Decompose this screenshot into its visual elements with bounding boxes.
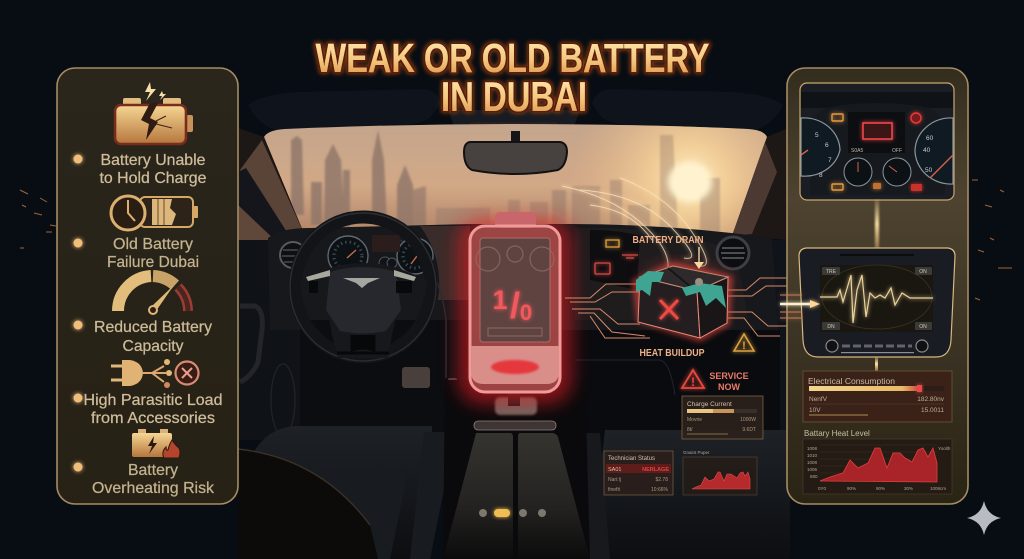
chart: battery heat level: 1008cm [930, 486, 946, 491]
chart: battery heat level: 90% [876, 486, 885, 491]
instrument cluster photo: 50 [925, 167, 933, 174]
chart: battery heat level: 880 [810, 474, 818, 479]
service now label: SERVICE [709, 371, 749, 381]
pedals [402, 367, 457, 393]
head unit [799, 248, 955, 357]
battery drain label: BATTERY DRAIN [632, 234, 704, 246]
panel: electrical consumption: NenfV [809, 396, 828, 403]
panel: electrical consumption: 182.80nv [917, 396, 945, 403]
icon: capacity gauge [118, 276, 188, 314]
panel: technician status: Nari:Ij [608, 477, 621, 483]
head unit: TRE [826, 269, 837, 275]
label: old battery failure dubai: Failure Dubai [107, 254, 199, 271]
light beams connecting screens [875, 200, 879, 371]
percentage symbol: / [510, 285, 520, 326]
wheel badge [343, 278, 380, 288]
panel: charge current: Charge Current [687, 401, 732, 408]
instrument cluster and air vents [280, 235, 749, 276]
label: reduced battery capacity: Capacity [122, 338, 184, 355]
chart: battery heat level: Yoolth [938, 446, 951, 451]
label: high parasitic load: High Parasitic Load [84, 392, 222, 409]
panel: technician status: Technician Status [608, 456, 655, 462]
instrument cluster photo: 6 [825, 142, 829, 149]
arrow into head unit [780, 295, 820, 318]
icon: red warning triangle [682, 370, 704, 389]
cluster warning lights [832, 113, 922, 191]
chart: battery heat level: 1010 [807, 453, 818, 458]
icon: yellow warning triangle: ! [742, 340, 746, 352]
instrument cluster photo: 5 [815, 132, 819, 139]
corrosion [636, 271, 726, 308]
chart: battery heat level: 90% [847, 486, 856, 491]
chart: battery heat level: 1006 [807, 467, 818, 472]
translucent battery gauge [458, 212, 572, 404]
car roof and sun visors [248, 89, 783, 132]
panel: charge current: 1000W [740, 417, 756, 423]
battery heat level label: Battary Heat Level [804, 429, 870, 438]
instrument cluster photo: 8 [819, 172, 823, 179]
circuit traces left [560, 284, 650, 338]
heat buildup label: HEAT BUILDUP [640, 347, 704, 359]
chart: battery heat level: 1008 [807, 446, 818, 451]
rear view mirror [464, 131, 567, 174]
chart: small power chart [683, 450, 757, 495]
label: reduced battery capacity [94, 319, 212, 355]
icon: clock and old battery [111, 196, 198, 230]
bullet [74, 154, 82, 164]
label: battery unable to hold charge [100, 152, 207, 187]
chart: battery heat level: 0Y0 [818, 486, 827, 491]
sparkle watermark [967, 501, 1001, 535]
label: battery overheating risk: Overheating Risk [92, 480, 215, 497]
label: battery unable to hold charge: to Hold Charge [100, 170, 207, 187]
head unit: ON [919, 269, 927, 275]
service now label [709, 371, 749, 392]
pillars and door panels [238, 128, 790, 440]
service now label: NOW [718, 382, 740, 392]
label: battery overheating risk [92, 462, 215, 497]
right panel [787, 68, 968, 504]
dashboard warning icons [595, 240, 638, 274]
panel: electrical consumption: 10V [809, 407, 821, 414]
instrument cluster photo: OFF [892, 148, 902, 154]
panel: electrical consumption: 15.0011 [921, 407, 944, 414]
steering wheel [290, 213, 436, 361]
left panel [57, 68, 238, 504]
instrument cluster photo [800, 83, 954, 200]
panel: technician status: $2.78 [655, 477, 668, 483]
bullet [74, 394, 82, 402]
circuit traces right [728, 278, 822, 336]
instrument cluster photo: 40 [923, 147, 931, 154]
label: old battery failure dubai: Old Battery [113, 236, 193, 253]
center console [443, 380, 590, 559]
label: high parasitic load [84, 392, 222, 427]
waveform [820, 275, 933, 323]
title [316, 35, 710, 120]
bullet [74, 462, 82, 472]
icon: overheating battery [132, 429, 180, 458]
title: WEAK OR OLD BATTERY [316, 35, 710, 81]
icon: plug with branches and error mark [111, 359, 198, 388]
panel: charge current: 9.6DT [742, 427, 756, 433]
sparks [20, 180, 1012, 300]
percentage symbol: 1 [492, 285, 508, 315]
panel: electrical consumption [803, 371, 952, 422]
panel: technician status: SA01 [608, 467, 621, 473]
dashboard [268, 224, 780, 440]
instrument cluster photo: S0A5 [851, 148, 863, 154]
panel: charge current: Movrie [687, 417, 702, 423]
title: IN DUBAI [441, 73, 587, 120]
percentage symbol: 0 [520, 300, 532, 325]
panel: electrical consumption: Electrical Consumption [808, 376, 895, 386]
icon: cracked battery [115, 82, 193, 144]
head unit: ON [919, 324, 927, 330]
chart: battery heat level: 1008 [807, 460, 818, 465]
bullet [74, 238, 82, 248]
label: reduced battery capacity: Reduced Battery [94, 319, 212, 336]
bullet [74, 320, 82, 330]
panel: technician status [604, 451, 673, 495]
chart: battery heat level: 30% [904, 486, 913, 491]
instrument cluster photo: 60 [926, 135, 934, 142]
windshield with Dubai skyline [264, 124, 767, 236]
seats [238, 426, 790, 559]
chart: battery heat level [803, 439, 952, 494]
label: battery unable to hold charge: Battery Unable [100, 152, 206, 169]
label: battery overheating risk: Battery [128, 462, 178, 479]
battery drain label [632, 234, 704, 269]
panel: charge current [682, 396, 763, 439]
label: old battery failure dubai [107, 236, 199, 271]
panel: technician status: NERLAGE [642, 467, 669, 473]
icon: yellow warning triangle [734, 334, 754, 352]
energy trails from sun to battery [562, 178, 706, 268]
red X mark [660, 300, 678, 319]
head unit: DN [827, 324, 835, 330]
icon: red warning triangle: ! [691, 375, 695, 389]
percentage symbol [492, 285, 532, 326]
panel: charge current: 8t/ [687, 427, 693, 433]
label: high parasitic load: from Accessories [91, 410, 215, 427]
corroded car battery [632, 262, 733, 342]
chart: small power chart: Gnaint Puper [683, 450, 710, 455]
instrument cluster photo: 7 [828, 157, 832, 164]
console indicator lights [479, 509, 546, 517]
panel: technician status: finefit [608, 487, 621, 493]
panel: technician status: 10:66% [651, 487, 669, 493]
